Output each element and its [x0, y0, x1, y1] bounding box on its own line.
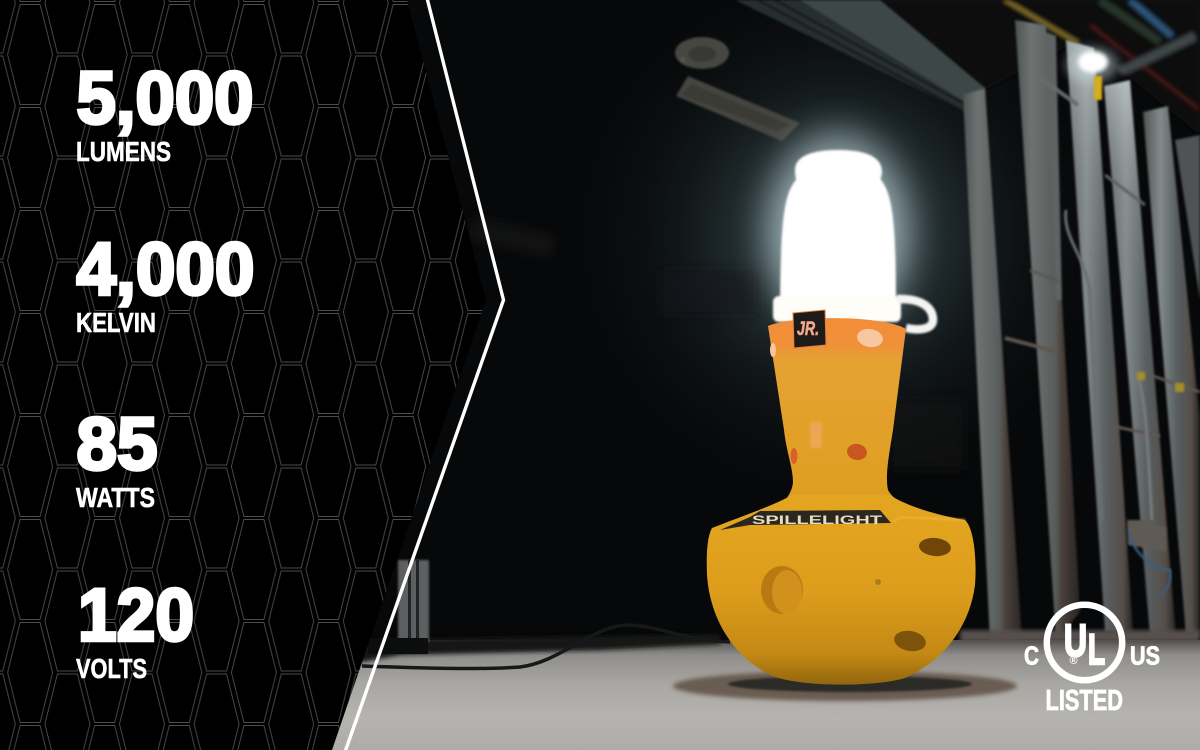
ceiling vent [676, 76, 800, 141]
stat: 85 watts: WATTS [76, 482, 155, 513]
lamp neck [768, 318, 912, 515]
UL listed mark: LISTED [1046, 685, 1123, 717]
illustration: yellow lamp [707, 132, 976, 685]
lamp glow on ceiling [430, 0, 1200, 640]
floor [330, 630, 1200, 750]
stat: 85 watts: 85 [76, 402, 158, 486]
illuminated globe [773, 150, 933, 329]
UL listed mark: U [1064, 615, 1087, 666]
steel beam [735, 0, 985, 125]
brand label [720, 510, 891, 530]
panel divider: white chevron line [345, 0, 504, 750]
stat: 4,000 kelvin: 4,000 [76, 228, 254, 310]
lamp holes [761, 327, 952, 654]
JR logo [793, 310, 826, 348]
stat: 4,000 kelvin: KELVIN [76, 307, 156, 338]
UL listed mark: ® [1070, 655, 1078, 667]
upper right ceiling with pipes [870, 0, 1200, 135]
stat: 5,000 lumens: LUMENS [76, 136, 171, 167]
power cord [362, 625, 730, 669]
ceiling diffuser [675, 37, 729, 69]
UL listed mark [1024, 605, 1160, 717]
stat: 5,000 lumens: 5,000 [76, 56, 254, 140]
panel: black spec panel with hexagon pattern [0, 0, 486, 750]
shoulder crease highlight [893, 517, 965, 522]
background equipment case [368, 560, 429, 654]
UL listed mark: L [1088, 626, 1105, 674]
stud cross bars and conduit [1005, 78, 1200, 596]
lamp base [707, 495, 976, 685]
JR logo: JR. [797, 319, 819, 340]
UL listed mark: C [1024, 640, 1039, 670]
work light on the wall [1066, 47, 1118, 100]
lamp halo [766, 132, 910, 332]
stat: 120 volts: 120 [78, 574, 194, 656]
floor shadow [673, 671, 1017, 701]
stat: 120 volts: VOLTS [76, 653, 147, 684]
UL listed mark: US [1130, 640, 1160, 670]
metal studs [963, 20, 1200, 640]
brand label: SPILLELIGHT [752, 513, 883, 527]
faint background racks [468, 217, 965, 470]
